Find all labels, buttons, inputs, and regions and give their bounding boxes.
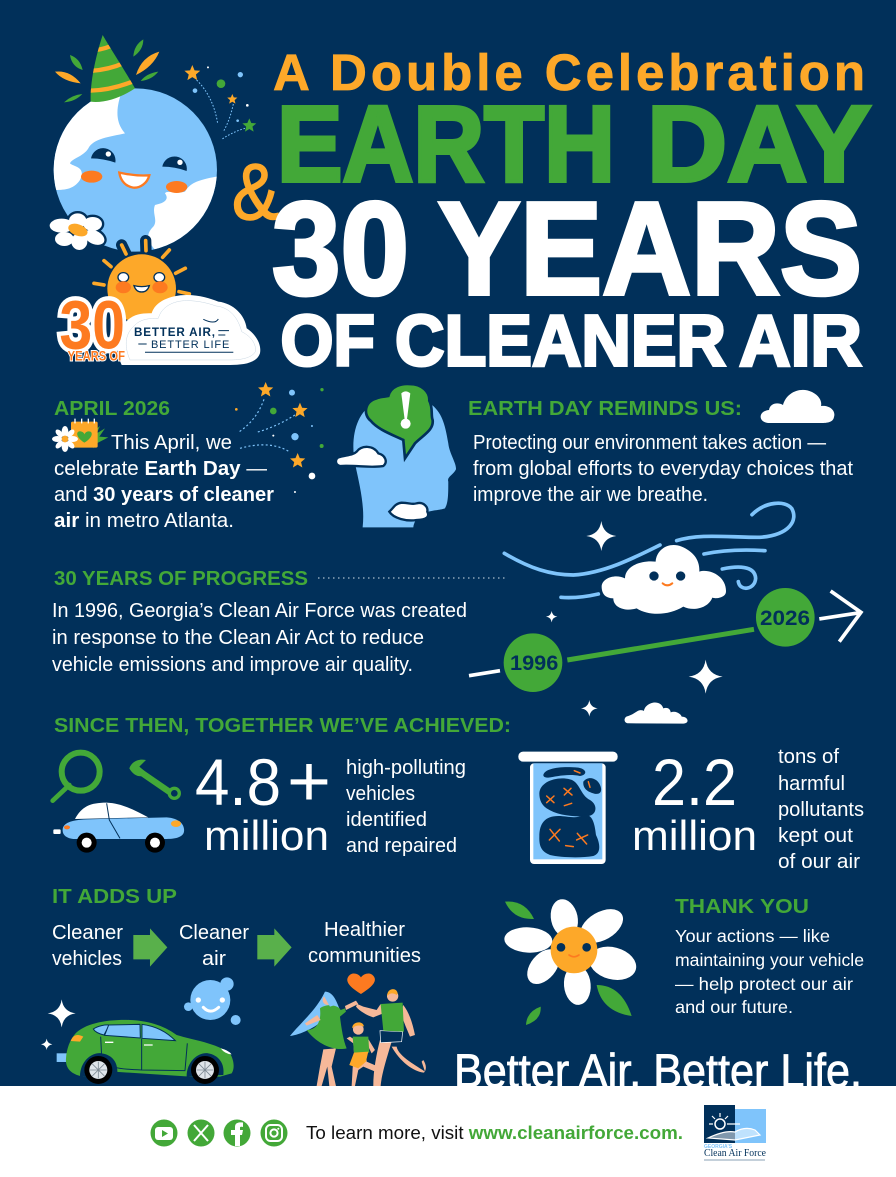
- heading: 30 YEARS OF PROGRESS: [54, 568, 308, 590]
- number: 4.8+ million: million: [204, 812, 329, 859]
- label: healthier communities: communities: [308, 945, 421, 967]
- text block: in response to the Clean Air Act to reduce: [52, 626, 424, 649]
- icon: smiling cloud: [602, 545, 726, 614]
- text block: high-polluting: [346, 757, 466, 779]
- logo: 30 years of better air better life: YEARS OF: [68, 348, 125, 364]
- panel: thank you: [504, 896, 864, 1025]
- number: 4.8+ million: [195, 742, 331, 859]
- label: cleaner air: air: [202, 948, 226, 970]
- label: cleaner vehicles: [52, 922, 123, 970]
- man: [356, 989, 426, 1086]
- logo: 30 years of better air better life: BETTER AIR,: [134, 326, 215, 339]
- text block: celebrate Earth Day —: [54, 457, 267, 480]
- title: 30 years: [272, 175, 862, 322]
- panel: it adds up: [41, 886, 426, 1086]
- logo: 30 years of better air better life: BETTER LIFE: [151, 339, 229, 351]
- number: 2.2 million: 2.2: [652, 745, 737, 819]
- title: ampersand: &: [232, 147, 279, 236]
- text block: improve the air we breathe.: [473, 483, 708, 506]
- number: 2.2 million: million: [632, 812, 757, 859]
- sparkles: [546, 521, 723, 717]
- text block: pollutants: [778, 799, 864, 821]
- label: cleaner vehicles: vehicles: [52, 948, 122, 970]
- text block: and 30 years of cleaner: [54, 483, 274, 506]
- text block: harmful: [778, 773, 845, 795]
- logo: clean air force: Clean Air Force: [704, 1147, 766, 1159]
- wind lines: [504, 503, 794, 598]
- text block: Your actions — like: [675, 926, 830, 946]
- panel: vehicles stat: [53, 742, 466, 859]
- title: 30 years: YEARS: [438, 175, 862, 322]
- illustration: timeline with wind cloud: [469, 503, 861, 724]
- marker: 1996: [504, 633, 562, 692]
- text block: maintaining your vehicle: [675, 950, 864, 970]
- logo: clean air force: [704, 1105, 766, 1160]
- logo: 30 years of better air better life: 30: [59, 287, 125, 363]
- text block: [54, 431, 274, 532]
- icon: x: [188, 1120, 214, 1146]
- fireworks: [184, 65, 256, 139]
- text block: — help protect our air: [675, 974, 853, 994]
- icon: magnifier: [53, 753, 100, 801]
- icons: magnifier wrench and car: [53, 753, 184, 853]
- icon: youtube: [150, 1120, 178, 1146]
- arrow: [819, 591, 861, 642]
- icon: calendar with daisy: [52, 419, 108, 452]
- title: of cleaner air: AIR: [739, 302, 862, 382]
- icon: facebook: [224, 1120, 250, 1146]
- label: cleaner vehicles: Cleaner: [52, 922, 123, 944]
- icon: head with speech bubble: [336, 384, 456, 527]
- marker: 1996: 1996: [510, 652, 558, 675]
- text block: [675, 926, 864, 1017]
- icon: smiling earth: [54, 88, 217, 252]
- text block: [473, 431, 853, 506]
- logo: clean air force: GEORGIA’S: [704, 1144, 733, 1150]
- icon: party hat: [88, 35, 135, 102]
- label: healthier communities: [308, 919, 421, 967]
- icon: wrench: [129, 760, 181, 800]
- text block: identified: [346, 809, 427, 831]
- sparkles: [41, 999, 76, 1050]
- icon: air bubble face: [184, 977, 241, 1025]
- timeline: [469, 588, 861, 692]
- panel: 30 years of progress: [52, 568, 506, 676]
- label: cleaner air: Cleaner: [179, 922, 249, 944]
- heading: since then: SINCE THEN, TOGETHER WE’VE ACHIEVED:: [54, 715, 511, 737]
- label: healthier communities: Healthier: [324, 919, 405, 941]
- logo: 30 years of better air better life: [59, 287, 260, 365]
- text block: and repaired: [346, 835, 457, 857]
- arrow: [257, 928, 292, 967]
- marker: 2026: [756, 588, 815, 647]
- text block: [778, 746, 864, 873]
- marker: 2026: 2026: [760, 607, 810, 630]
- icon: heart: [347, 974, 375, 994]
- icon: smiling daisy with leaves: [504, 897, 640, 1025]
- heading: THANK YOU: [675, 896, 809, 918]
- number: 4.8+ million: 4.8: [195, 745, 281, 819]
- title: earth day: DAY: [647, 83, 871, 204]
- text block: of our air: [778, 851, 860, 873]
- woman: [290, 992, 358, 1086]
- title: 30 years: 30: [272, 175, 409, 322]
- icon: small cloud: [625, 703, 688, 724]
- text block: kept out: [778, 825, 853, 847]
- confetti: [55, 39, 159, 102]
- panel: pollutants stat: [518, 745, 864, 873]
- title: of cleaner air: CLEANER: [395, 302, 726, 382]
- icon: blue car: [53, 803, 184, 853]
- text block: vehicles: [346, 783, 415, 805]
- text block: air in metro Atlanta.: [54, 509, 234, 532]
- title: a double celebration: A Double Celebration: [273, 44, 865, 101]
- text block: tons of: [778, 746, 839, 768]
- text block: [346, 757, 466, 857]
- title: of cleaner air: OF: [280, 302, 375, 382]
- text block: vehicle emissions and improve air quality.: [52, 653, 413, 676]
- icon: instagram: [260, 1120, 288, 1146]
- illustration: family: [290, 989, 426, 1086]
- arrow: [133, 928, 167, 967]
- child: [347, 1022, 378, 1086]
- icon: small cloud: [761, 390, 834, 423]
- panel: footer: [0, 1086, 896, 1177]
- text block: This April, we: [111, 431, 232, 454]
- text block: from global efforts to everyday choices that: [473, 457, 853, 480]
- panel: april 2026: [54, 398, 274, 532]
- heading: IT ADDS UP: [52, 886, 177, 908]
- icon: filter cup: [518, 752, 618, 864]
- tagline: Better Air. Better Life.: [454, 1044, 862, 1097]
- label: cleaner air: [179, 922, 249, 970]
- earth and logo illustration: [43, 35, 260, 365]
- icon: green car: [57, 1020, 234, 1084]
- title: earth day: [277, 83, 871, 204]
- number: 4.8+ million: +: [287, 742, 331, 822]
- text block: Protecting our environment takes action —: [473, 431, 826, 454]
- icon: smiling sun: [94, 241, 189, 323]
- fireworks: [235, 382, 324, 493]
- heading: EARTH DAY REMINDS US:: [468, 398, 742, 420]
- text block: In 1996, Georgia’s Clean Air Force was created: [52, 599, 467, 622]
- panel: earth day reminds us: [468, 390, 853, 506]
- text block: [52, 599, 467, 676]
- call to action: To learn more, visit www.cleanairforce.com.: [306, 1122, 683, 1143]
- icon: daisy: [50, 213, 107, 250]
- title: of cleaner air: [280, 302, 862, 382]
- text block: and our future.: [675, 997, 793, 1017]
- title: earth day: EARTH: [277, 83, 615, 204]
- heading: APRIL 2026: [54, 398, 170, 420]
- number: 2.2 million: [632, 745, 757, 859]
